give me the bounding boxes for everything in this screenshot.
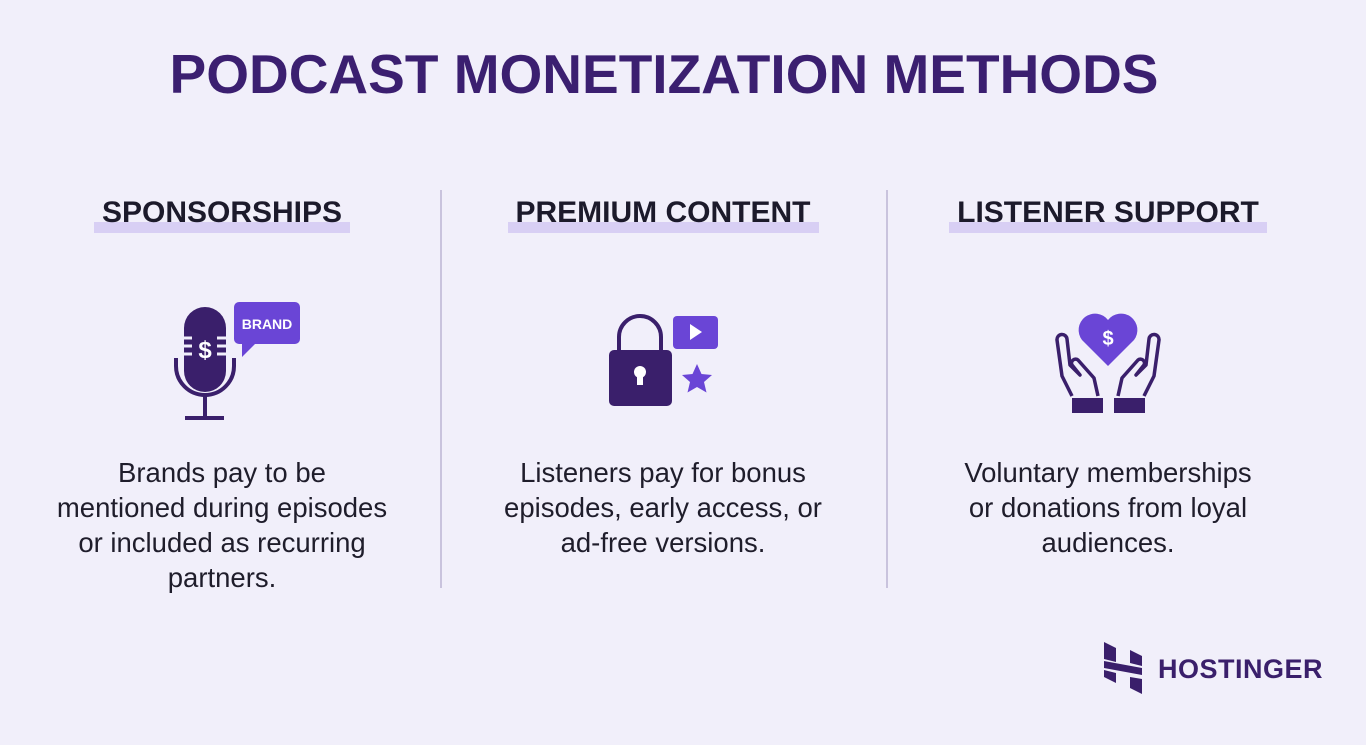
logo: hostinger: [1104, 642, 1323, 694]
text: listener support: Voluntary memberships: [964, 457, 1252, 488]
title: PODCAST MONETIZATION METHODS: [170, 43, 1158, 105]
text: listener support: audiences.: [1041, 527, 1174, 558]
logo text: HOSTINGER: [1158, 654, 1323, 684]
panel: sponsorships: [57, 196, 387, 593]
text: premium content: ad-free versions.: [561, 527, 765, 558]
text: sponsorships: [57, 457, 387, 593]
text: sponsorships: or included as recurring: [78, 527, 366, 558]
text: premium content: Listeners pay for bonus: [520, 457, 806, 488]
text: premium content: episodes, early access, or: [504, 492, 822, 523]
text: sponsorships: partners.: [168, 562, 276, 593]
heading: listener support: LISTENER SUPPORT: [957, 196, 1259, 229]
icon: microphone with brand bubble: $: [198, 337, 212, 364]
text: sponsorships: Brands pay to be: [118, 457, 326, 488]
panel: premium content: [504, 196, 822, 558]
text: sponsorships: mentioned during episodes: [57, 492, 387, 523]
icon: hands with heart: [1055, 314, 1161, 413]
heading: sponsorships: SPONSORSHIPS: [102, 196, 342, 229]
icon: lock, play, star: [609, 314, 718, 406]
heading: premium content: PREMIUM CONTENT: [516, 196, 810, 229]
icon: hostinger H: [1104, 642, 1142, 694]
text: listener support: or donations from loyal: [969, 492, 1247, 523]
text: premium content: [504, 457, 822, 558]
panel: listener support: [949, 196, 1267, 558]
text: listener support: [964, 457, 1252, 558]
icon: microphone with brand bubble: BRAND: [242, 316, 292, 332]
icon: microphone with brand bubble: [174, 302, 300, 420]
icon: hands with heart: $: [1102, 328, 1114, 350]
